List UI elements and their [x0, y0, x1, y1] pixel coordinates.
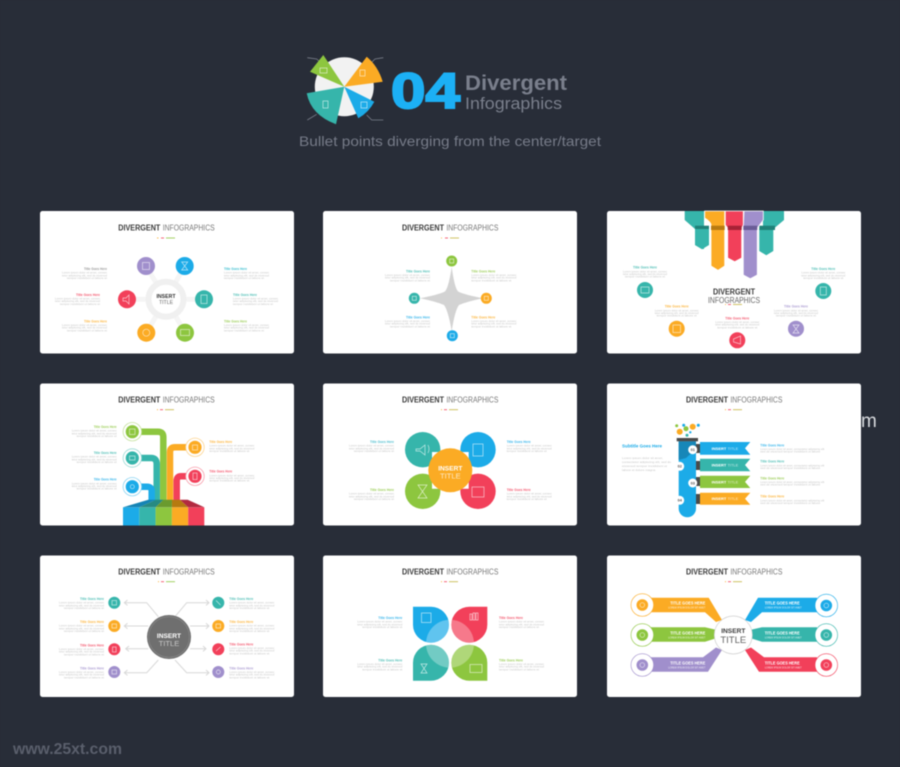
- text: green: [72, 425, 117, 438]
- text: right 4: Lorem ipsum dolor sit amet, consec: [229, 670, 275, 674]
- step numbers: 01: [691, 448, 695, 452]
- subtitle text block: [622, 444, 671, 472]
- star: [420, 267, 483, 331]
- text: far right: tempor incididunt ut labore et: [803, 276, 843, 280]
- text: top left: tetur adipiscing elit, sed do eiusmod: [62, 273, 107, 277]
- text: inner right: tetur adipiscing elit, sed do eiusmod: [774, 311, 818, 315]
- heading: DIVERGENT: [118, 224, 160, 232]
- heading: DIVERGENT: [402, 395, 444, 404]
- text: far left: Title Goes Here: [633, 266, 657, 270]
- text: left 1: tetur adipiscing elit, sed do eiusmod: [59, 603, 104, 607]
- text: red: tempor incididunt ut labore et: [209, 479, 249, 483]
- centre hub: [714, 616, 752, 654]
- panel: hexagon hub: [40, 211, 294, 354]
- icon nodes: [108, 597, 224, 678]
- icon nodes: [123, 422, 204, 496]
- text: bottom right: tetur adipiscing elit, sed do eiusmod: [224, 326, 269, 330]
- arm labels: TITLE GOES HERE: [765, 630, 800, 636]
- arm labels: TITLE GOES HERE: [765, 660, 800, 666]
- text: left 3: tempor incididunt ut labore et: [64, 652, 104, 656]
- heading: [118, 224, 215, 238]
- step numbers: 02: [678, 465, 682, 469]
- heading: Divergent Infographics: Divergent: [465, 72, 567, 95]
- ribbons: INSERT TITLE: [712, 446, 739, 451]
- text: bottom left: tempor incididunt ut labore et: [354, 497, 394, 501]
- text: blue: [72, 478, 117, 491]
- text: bottom right: Lorem ipsum dolor sit amet, consec: [471, 319, 517, 323]
- text: left 2: tetur adipiscing elit, sed do eiusmod: [59, 626, 104, 630]
- arm labels: LOREM IPSUM DOLOR SIT AMET: [765, 666, 802, 670]
- icon nodes: [409, 256, 492, 341]
- text: bottom right: Lorem ipsum dolor sit amet, consec: [507, 492, 552, 496]
- text: bottom left: [357, 658, 403, 671]
- heading: DIVERGENT: [686, 395, 728, 404]
- text: right 2: tempor incididunt ut labore et: [229, 629, 269, 633]
- petals: [413, 607, 487, 681]
- text: left 2: Lorem ipsum dolor sit amet, consec: [59, 624, 104, 628]
- text: top right: tempor incididunt ut labore et: [507, 449, 547, 453]
- text: top left: Lorem ipsum dolor sit amet, consec: [385, 273, 430, 277]
- text: bottom left: Title Goes Here: [378, 658, 402, 662]
- text: top left: [349, 440, 394, 453]
- text: orange: tetur adipiscing elit, sed do eiusmod: [209, 446, 255, 450]
- arm labels: TITLE GOES HERE: [765, 600, 800, 606]
- arrows: [124, 600, 209, 675]
- text: bottom right: Title Goes Here: [499, 658, 523, 662]
- heading: DIVERGENT: [118, 395, 160, 404]
- text: row 2: Title Goes Here: [760, 460, 784, 464]
- text: right 3: Lorem ipsum dolor sit amet, consec: [229, 646, 275, 650]
- text: middle right: Title Goes Here: [233, 293, 257, 297]
- text: left 3: Title Goes Here: [80, 643, 104, 647]
- text: left 4: Lorem ipsum dolor sit amet, consec: [59, 670, 104, 674]
- heading: INFOGRAPHICS: [730, 395, 782, 404]
- text: bottom right: Title Goes Here: [471, 315, 495, 319]
- heading: DIVERGENT: [713, 286, 756, 296]
- text: inner right: Title Goes Here: [784, 305, 808, 309]
- subtitle text block: Subtitle Goes Here: [622, 444, 662, 448]
- arm labels: [668, 600, 802, 670]
- branch lines: [132, 432, 195, 501]
- text: middle left: Lorem ipsum dolor sit amet, consec: [55, 296, 100, 300]
- text: teal: Title Goes Here: [94, 451, 117, 455]
- text: bottom right: [507, 488, 552, 501]
- text: bottom left: tetur adipiscing elit, sed do eiusmod: [357, 665, 403, 669]
- text: middle left: Title Goes Here: [76, 293, 100, 297]
- ribbons: [696, 442, 750, 505]
- text: bottom left: Lorem ipsum dolor sit amet, consec: [62, 323, 107, 327]
- text: red: Lorem ipsum dolor sit amet, consec: [209, 473, 255, 477]
- rainbow base: [123, 500, 204, 526]
- subtitle text block: eiusmod tempor incididunt ut: [622, 464, 667, 468]
- watermark: www.25xt.com: [12, 741, 122, 758]
- step numbers: 04: [678, 499, 683, 503]
- text: right 2: [229, 620, 275, 633]
- text: top right: tetur adipiscing elit, sed do eiusmod: [507, 446, 552, 450]
- text: bottom left: tempor incididunt ut labore et: [362, 667, 402, 671]
- text: bottom right: [471, 315, 517, 328]
- text: bottom left: Title Goes Here: [370, 488, 394, 492]
- text: red: Title Goes Here: [209, 470, 232, 474]
- text: green: Title Goes Here: [94, 425, 117, 429]
- header logo: pie with wedges: [307, 55, 383, 124]
- text: bottom right: tempor incididunt ut labore et: [499, 667, 539, 671]
- text: top left: Lorem ipsum dolor sit amet, consec: [349, 444, 394, 448]
- heading: DIVERGENT: [686, 567, 728, 576]
- centre hub: INSERT: [721, 628, 745, 635]
- text: centre: Title Goes Here: [725, 316, 749, 320]
- text: right 3: tempor incididunt ut labore et: [229, 651, 269, 655]
- text: top left: [385, 269, 430, 282]
- text: row 4: Lorem ipsum dolor sit amet, consectetur adipiscing elit: [760, 498, 824, 502]
- text: far right: Lorem ipsum dolor sit amet, consec: [801, 271, 846, 275]
- heading: [402, 395, 498, 410]
- text: top right: Lorem ipsum dolor sit amet, consec: [507, 444, 552, 448]
- text: bottom right: tempor incididunt ut labore et: [471, 324, 511, 328]
- heading: DIVERGENT: [402, 567, 444, 576]
- insert title: TITLE: [159, 300, 174, 306]
- text: bottom right: Lorem ipsum dolor sit amet, consec: [224, 323, 269, 327]
- panel: four-point star: [323, 211, 577, 354]
- ribbons: INSERT TITLE: [712, 462, 739, 468]
- text: bottom left: [385, 315, 430, 328]
- text: centre: tetur adipiscing elit, sed do eiusmod: [715, 323, 760, 327]
- text: inner left: tempor incididunt ut labore et: [657, 314, 697, 318]
- arm labels: LOREM IPSUM DOLOR SIT AMET: [765, 636, 802, 640]
- heading: INFOGRAPHICS: [708, 296, 760, 305]
- text: centre: [715, 316, 760, 329]
- orange hub: [428, 448, 472, 492]
- arm labels: TITLE GOES HERE: [670, 630, 705, 636]
- text: row 4: sed do eiusmod tempor incididunt ut labore: [760, 501, 821, 505]
- text: bottom left: Title Goes Here: [84, 319, 107, 323]
- text: row 3: Title Goes Here: [760, 476, 784, 480]
- text: bottom right: Title Goes Here: [224, 319, 247, 323]
- text: bottom right: tetur adipiscing elit, sed do eiusmod: [507, 494, 552, 498]
- heading: DIVERGENT: [118, 567, 160, 576]
- arm labels: LOREM IPSUM DOLOR SIT AMET: [668, 606, 706, 610]
- text: top left: tempor incididunt ut labore et: [362, 625, 402, 629]
- text: bottom left: tetur adipiscing elit, sed do eiusmod: [349, 494, 394, 498]
- text: right 1: [229, 597, 275, 610]
- text: bottom left: Lorem ipsum dolor sit amet, consec: [357, 662, 403, 666]
- text: left 2: tempor incididunt ut labore et: [64, 629, 104, 633]
- text: bottom left: Title Goes Here: [406, 315, 430, 319]
- text: top right: tetur adipiscing elit, sed do eiusmod: [499, 622, 544, 626]
- panel: rainbow branches: [40, 384, 294, 526]
- text: red: tetur adipiscing elit, sed do eiusmod: [209, 476, 255, 480]
- text: inner left: Lorem ipsum dolor sit amet, consec: [655, 308, 699, 312]
- heading: Divergent Infographics: [465, 72, 567, 113]
- text: right 3: Title Goes Here: [229, 642, 253, 646]
- text: top left: tetur adipiscing elit, sed do eiusmod: [357, 622, 403, 626]
- text: top left: Lorem ipsum dolor sit amet, consec: [357, 620, 403, 624]
- text: row 3: Lorem ipsum dolor sit amet, consectetur adipiscing elit: [760, 480, 824, 484]
- text: inner left: Title Goes Here: [665, 305, 689, 309]
- heading: INFOGRAPHICS: [163, 224, 215, 232]
- text: top left: tempor incididunt ut labore et: [67, 276, 107, 280]
- heading: INFOGRAPHICS: [446, 224, 498, 232]
- heading: INFOGRAPHICS: [163, 395, 215, 404]
- text: bottom left: [349, 488, 394, 501]
- text: top right: Title Goes Here: [224, 267, 247, 271]
- text: bottom right: tetur adipiscing elit, sed do eiusmod: [471, 322, 517, 326]
- grey hub: [147, 615, 191, 659]
- text: row 1: [760, 443, 824, 454]
- heading: [686, 567, 782, 582]
- text: middle right: [233, 293, 278, 306]
- number 04: 04: [391, 63, 460, 119]
- text: top left: Lorem ipsum dolor sit amet, consec: [62, 271, 107, 275]
- heading: [118, 567, 215, 582]
- text: middle left: tempor incididunt ut labore et: [60, 302, 100, 306]
- text: bottom left: tempor incididunt ut labore et: [67, 328, 107, 332]
- text: right 2: Title Goes Here: [229, 620, 253, 624]
- text: right 4: tempor incididunt ut labore et: [229, 675, 269, 679]
- text: bottom left: tetur adipiscing elit, sed do eiusmod: [385, 322, 430, 326]
- text: top left: [357, 616, 403, 629]
- text: teal: [72, 451, 117, 464]
- text: right 4: [229, 666, 275, 679]
- text: top right: Lorem ipsum dolor sit amet, consec: [471, 273, 517, 277]
- text: far right: Title Goes Here: [811, 267, 835, 271]
- text: right 4: Title Goes Here: [229, 666, 253, 670]
- text: left 4: Title Goes Here: [80, 666, 104, 670]
- text: row 1: Lorem ipsum dolor sit amet, consectetur adipiscing elit: [760, 447, 824, 451]
- arm labels: TITLE GOES HERE: [670, 600, 705, 606]
- text: right 3: [229, 642, 275, 655]
- text: green: tetur adipiscing elit, sed do eiusmod: [72, 431, 117, 435]
- text: left 2: Title Goes Here: [80, 620, 104, 624]
- grey hub: TITLE: [159, 639, 179, 648]
- text: orange: Title Goes Here: [209, 440, 232, 444]
- text: bottom right: [499, 658, 544, 671]
- icon nodes: [118, 257, 213, 342]
- panel: four petals: [323, 556, 577, 697]
- panel: test tube: [607, 384, 861, 526]
- text: left 3: tetur adipiscing elit, sed do eiusmod: [59, 650, 104, 654]
- insert title: INSERT: [156, 294, 176, 300]
- heading: [708, 286, 760, 305]
- arm labels: LOREM IPSUM DOLOR SIT AMET: [668, 666, 706, 670]
- subtitle text block: Lorem ipsum dolor sit amet,: [622, 456, 663, 460]
- arm labels: TITLE GOES HERE: [670, 660, 705, 666]
- ribbons: INSERT TITLE: [712, 496, 739, 501]
- text: far left: Lorem ipsum dolor sit amet, consec: [623, 269, 667, 273]
- icon nodes: [637, 282, 831, 348]
- text: top right: tetur adipiscing elit, sed do eiusmod: [471, 276, 517, 280]
- heading: [118, 395, 215, 410]
- text: bottom right: tempor incididunt ut labore et: [224, 328, 264, 332]
- text: left 4: tempor incididunt ut labore et: [64, 675, 104, 679]
- text: left 1: Title Goes Here: [80, 597, 104, 601]
- text: row 2: [760, 460, 824, 470]
- text: top left: tempor incididunt ut labore et: [354, 449, 394, 453]
- arms: [650, 598, 817, 672]
- text: top right: [224, 267, 269, 280]
- text: bottom right: tempor incididunt ut labore et: [507, 497, 547, 501]
- text: orange: [209, 440, 255, 453]
- text: middle right: tetur adipiscing elit, sed do eiusmod: [233, 299, 278, 303]
- text: centre: tempor incididunt ut labore et: [717, 325, 757, 329]
- text: left 1: Lorem ipsum dolor sit amet, consec: [59, 601, 104, 605]
- hub ring: [127, 266, 204, 333]
- text: right 1: tetur adipiscing elit, sed do eiusmod: [229, 603, 275, 607]
- text: bottom right: Lorem ipsum dolor sit amet, consec: [499, 662, 544, 666]
- text: bottom left: Lorem ipsum dolor sit amet, consec: [349, 492, 394, 496]
- centre hub: TITLE: [720, 635, 746, 646]
- text: bottom right: [224, 319, 269, 332]
- text: bottom right: tetur adipiscing elit, sed do eiusmod: [499, 665, 544, 669]
- text: green: Lorem ipsum dolor sit amet, consec: [72, 429, 117, 433]
- text: top right: Title Goes Here: [499, 616, 523, 620]
- text: teal: tetur adipiscing elit, sed do eiusmod: [72, 457, 117, 461]
- text: middle right: tempor incididunt ut labore et: [233, 302, 273, 306]
- text: inner right: Lorem ipsum dolor sit amet, consec: [774, 308, 818, 312]
- insert title: INSERT: [438, 466, 462, 472]
- text: top left: Title Goes Here: [84, 267, 107, 271]
- end circles: [631, 594, 838, 676]
- text: top right: tetur adipiscing elit, sed do eiusmod: [224, 273, 269, 277]
- insert title: [438, 466, 462, 480]
- text: top right: [471, 269, 517, 282]
- text: top right: Lorem ipsum dolor sit amet, consec: [499, 620, 544, 624]
- text: middle right: Lorem ipsum dolor sit amet, consec: [233, 296, 278, 300]
- text: bottom right: Title Goes Here: [507, 488, 531, 492]
- text: right 1: Title Goes Here: [229, 597, 253, 601]
- text: right 1: tempor incididunt ut labore et: [229, 606, 269, 610]
- tube and bubbles: [675, 424, 700, 517]
- text: far right: [801, 267, 846, 280]
- text: red: [209, 470, 255, 483]
- text: bottom left: tetur adipiscing elit, sed do eiusmod: [62, 326, 107, 330]
- text: top right: Lorem ipsum dolor sit amet, consec: [224, 271, 269, 275]
- text: top right: [507, 440, 552, 453]
- circles: [405, 432, 496, 509]
- text: blue: tempor incididunt ut labore et: [77, 487, 117, 491]
- text: left 3: [59, 643, 104, 656]
- text: top right: Title Goes Here: [471, 269, 495, 273]
- text: orange: Lorem ipsum dolor sit amet, consec: [209, 444, 255, 448]
- text: left 1: [59, 597, 104, 610]
- text: inner left: [655, 305, 699, 318]
- heading: DIVERGENT: [402, 224, 444, 232]
- panel: six arms to hub: [607, 556, 861, 697]
- text: top left: Title Goes Here: [378, 616, 402, 620]
- text: row 4: [760, 495, 824, 505]
- text: right 1: Lorem ipsum dolor sit amet, consec: [229, 601, 275, 605]
- heading: INFOGRAPHICS: [163, 567, 215, 576]
- heading: [402, 567, 498, 582]
- text: top right: Title Goes Here: [507, 440, 531, 444]
- ribbons: [685, 211, 784, 279]
- text: top right: tempor incididunt ut labore et: [471, 278, 511, 282]
- text: inner left: tetur adipiscing elit, sed do eiusmod: [655, 311, 699, 315]
- text: top left: tetur adipiscing elit, sed do eiusmod: [349, 446, 394, 450]
- subtitle text block: labore et dolore magna.: [622, 468, 656, 472]
- text: teal: Lorem ipsum dolor sit amet, consec: [72, 455, 117, 459]
- text: row 1: sed do eiusmod tempor incididunt ut labore: [760, 450, 821, 454]
- heading: INFOGRAPHICS: [730, 567, 782, 576]
- subtitle text block: consectetur adipiscing elit, sed do: [622, 460, 671, 464]
- text: far left: tetur adipiscing elit, sed do eiusmod: [623, 272, 667, 276]
- text: top left: Title Goes Here: [406, 269, 430, 273]
- text: far left: tempor incididunt ut labore et: [625, 275, 665, 279]
- insert title: TITLE: [440, 472, 461, 480]
- text: right 4: tetur adipiscing elit, sed do eiusmod: [229, 673, 275, 677]
- text: right 2: tetur adipiscing elit, sed do eiusmod: [229, 626, 275, 630]
- text: bottom left: [62, 319, 107, 332]
- grey hub: INSERT: [157, 633, 181, 640]
- step numbers: 03: [691, 481, 695, 485]
- heading: INFOGRAPHICS: [446, 395, 498, 404]
- text: row 4: Title Goes Here: [760, 495, 784, 499]
- text: middle left: [55, 293, 100, 306]
- watermark fragment: m: [861, 411, 877, 432]
- text: top left: [62, 267, 107, 280]
- text: left 4: tetur adipiscing elit, sed do eiusmod: [59, 673, 104, 677]
- text: row 2: sed do eiusmod tempor incididunt ut labore: [760, 466, 821, 470]
- text: orange: tempor incididunt ut labore et: [209, 449, 249, 453]
- text: top right: [499, 616, 544, 629]
- text: right 2: Lorem ipsum dolor sit amet, consec: [229, 624, 275, 628]
- arm labels: LOREM IPSUM DOLOR SIT AMET: [765, 606, 802, 610]
- text: blue: tetur adipiscing elit, sed do eiusmod: [72, 484, 117, 488]
- text: inner right: tempor incididunt ut labore et: [776, 314, 816, 318]
- text: right 3: tetur adipiscing elit, sed do eiusmod: [229, 649, 275, 653]
- heading: INFOGRAPHICS: [446, 567, 498, 576]
- text: row 1: Title Goes Here: [760, 443, 784, 447]
- text: row 3: [760, 476, 824, 487]
- text: middle left: tetur adipiscing elit, sed do eiusmod: [55, 299, 100, 303]
- panel: grey hub with arrows: [40, 556, 294, 697]
- text: top left: Title Goes Here: [370, 440, 394, 444]
- text: top right: tempor incididunt ut labore et: [224, 276, 264, 280]
- text: left 2: [59, 620, 104, 633]
- text: top left: tempor incididunt ut labore et: [390, 278, 430, 282]
- text: bottom left: tempor incididunt ut labore et: [390, 324, 430, 328]
- text: bottom left: Lorem ipsum dolor sit amet, consec: [385, 319, 430, 323]
- step numbers: [675, 445, 697, 505]
- text: inner right: [774, 305, 818, 318]
- panel: four circles with orange hub: [323, 384, 577, 526]
- text: green: tempor incididunt ut labore et: [77, 434, 117, 438]
- text: centre: Lorem ipsum dolor sit amet, consec: [715, 320, 760, 324]
- text: left 1: tempor incididunt ut labore et: [64, 606, 104, 610]
- text: left 3: Lorem ipsum dolor sit amet, consec: [59, 647, 104, 651]
- text: row 2: Lorem ipsum dolor sit amet, consectetur adipiscing elit: [760, 463, 824, 467]
- text: blue: Title Goes Here: [94, 478, 117, 482]
- text: blue: Lorem ipsum dolor sit amet, consec: [72, 481, 117, 485]
- text: top right: tempor incididunt ut labore et: [499, 625, 539, 629]
- panel: hanging ribbons: [607, 211, 861, 354]
- text: row 3: sed do eiusmod tempor incididunt ut labore: [760, 483, 821, 487]
- text: left 4: [59, 666, 104, 679]
- text: top left: tetur adipiscing elit, sed do eiusmod: [385, 276, 430, 280]
- subtitle: Bullet points diverging from the center/target: [299, 133, 601, 149]
- text: far left: [623, 266, 667, 279]
- arm labels: LOREM IPSUM DOLOR SIT AMET: [668, 636, 706, 640]
- text: teal: tempor incididunt ut labore et: [77, 460, 117, 464]
- insert title: [156, 294, 176, 306]
- ribbons: INSERT TITLE: [712, 479, 739, 484]
- heading: [402, 224, 498, 238]
- heading: [686, 395, 782, 410]
- text: far right: tetur adipiscing elit, sed do eiusmod: [801, 273, 846, 277]
- heading: Divergent Infographics: Infographics: [465, 94, 562, 113]
